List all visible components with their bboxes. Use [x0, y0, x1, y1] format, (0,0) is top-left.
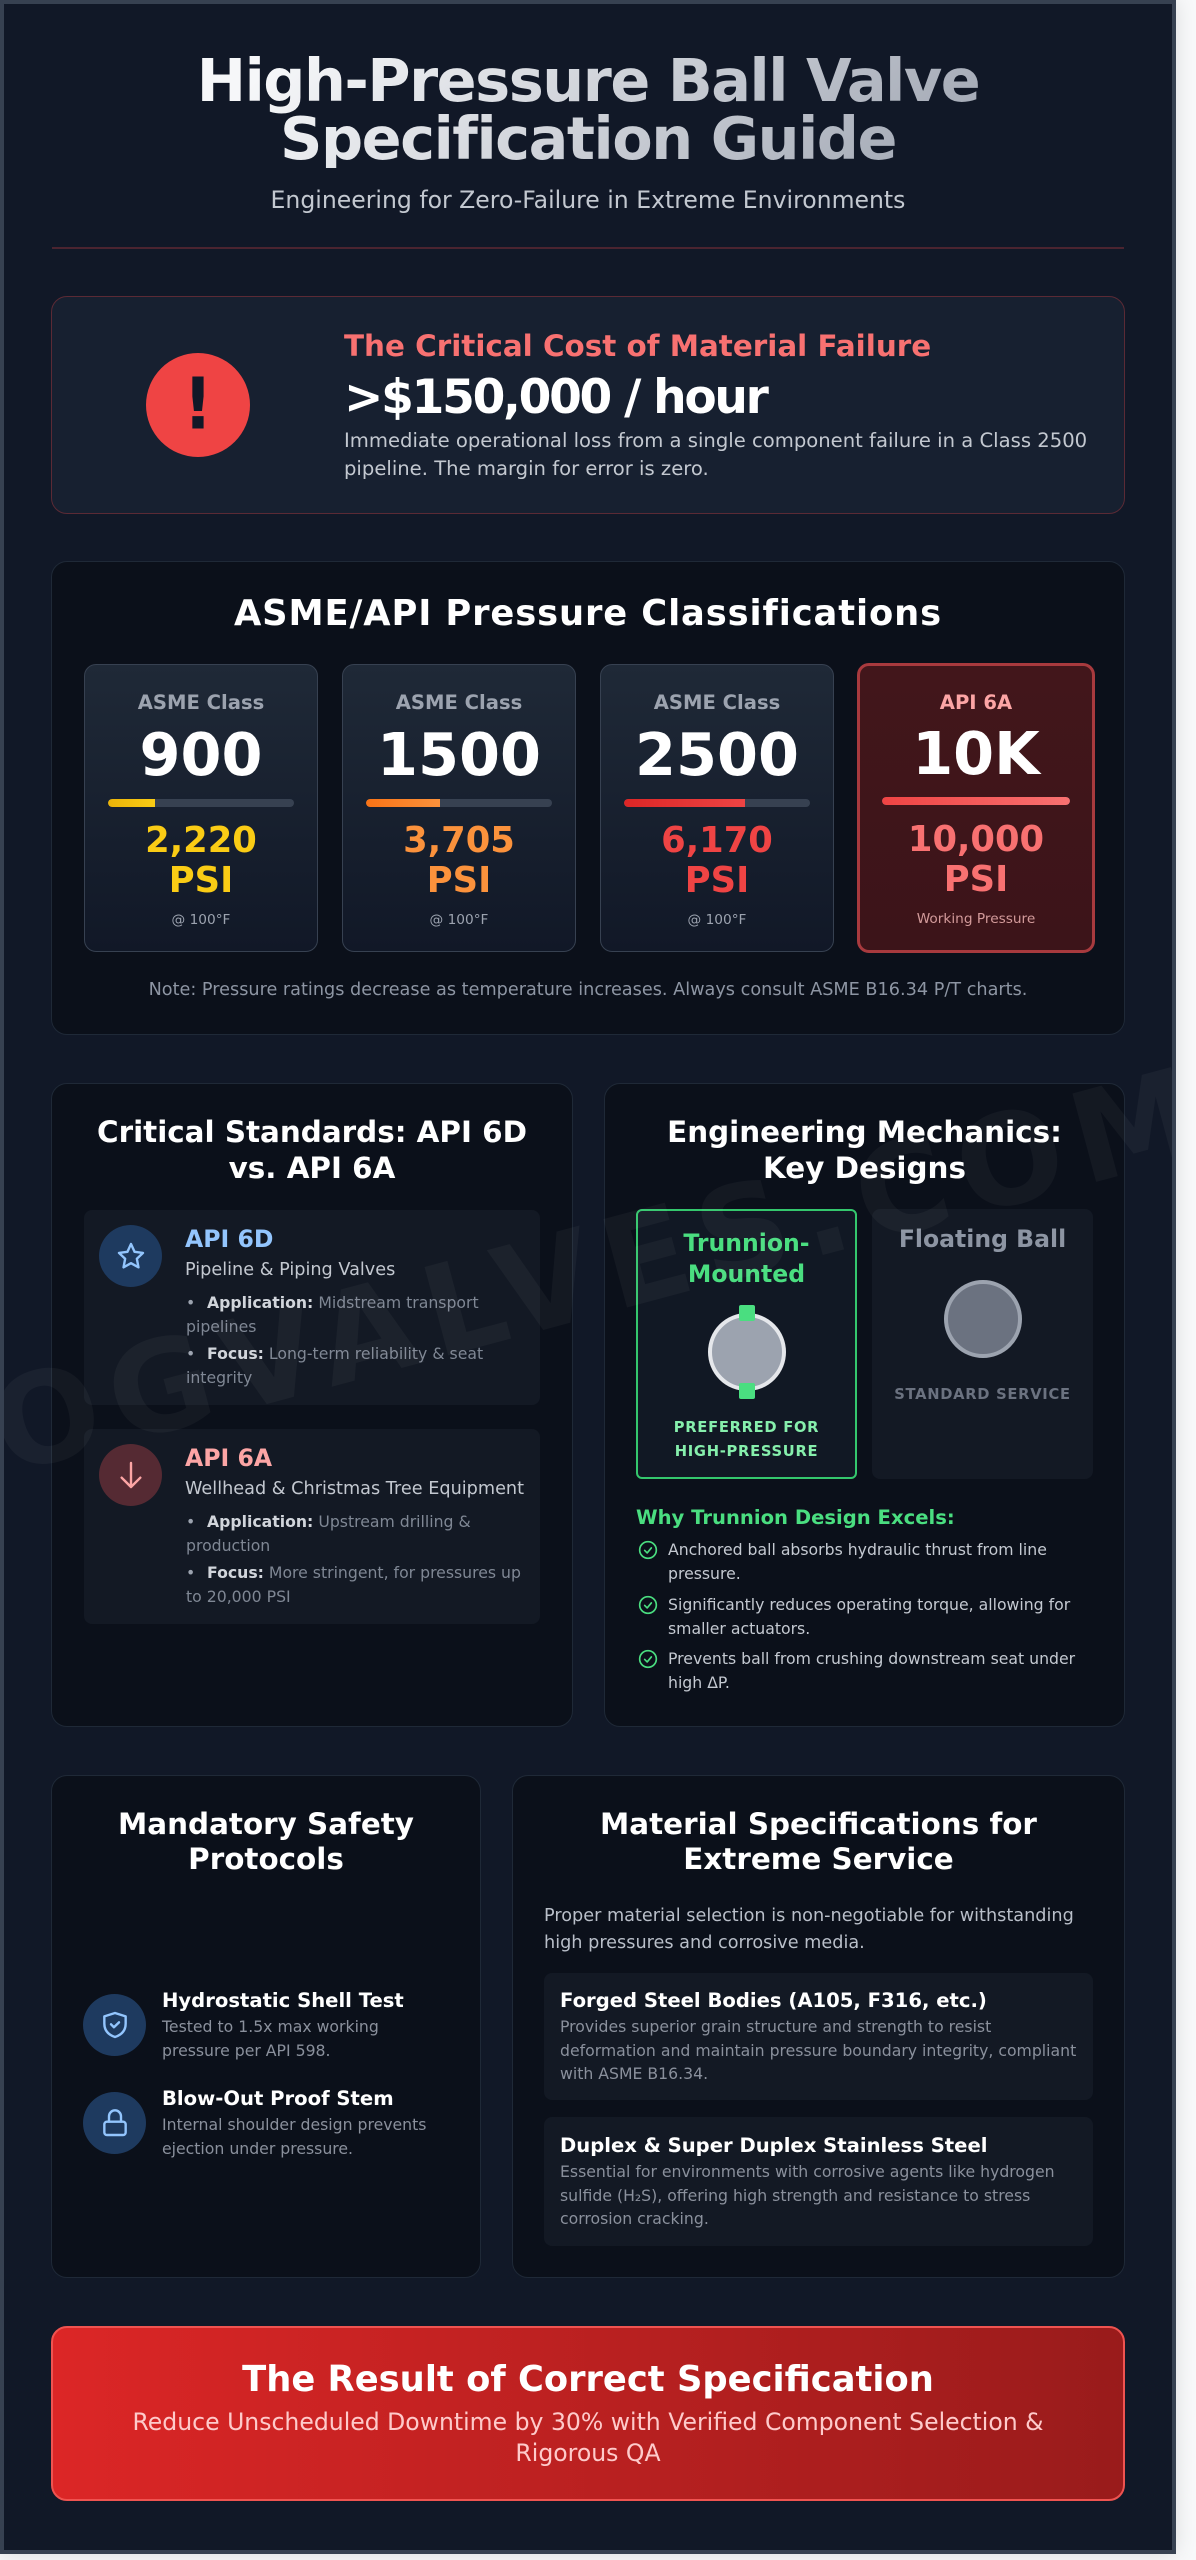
card: class 2500: @ 100°F	[688, 912, 746, 928]
panel: engineering mechanics	[604, 1083, 1125, 1727]
protocol: blow-out stem: ejection under pressure.	[162, 2138, 353, 2158]
trunnion note	[674, 1419, 819, 1460]
alert body	[344, 429, 1087, 480]
diagram: trunnion ball	[708, 1313, 786, 1391]
title: High-Pressure Ball Valve	[197, 46, 979, 115]
icon: star	[99, 1225, 162, 1287]
API 6D list: Application: Midstream transport	[207, 1293, 479, 1312]
API 6D list: pipelines	[186, 1317, 256, 1336]
API 6A focus: •	[186, 1563, 195, 1582]
callout: result	[51, 2326, 1125, 2501]
trunnion title: Trunnion-	[683, 1229, 810, 1257]
icon: lock	[83, 2092, 146, 2154]
benefit 2: smaller actuators.	[668, 1618, 810, 1638]
material: forged steel: with ASME B16.34.	[560, 2064, 708, 2083]
card: class 2500: ASME Class	[654, 691, 780, 714]
benefit 1	[638, 1540, 1047, 1583]
alert heading: The Critical Cost of Material Failure	[344, 329, 931, 363]
API 6A list: Application: Upstream drilling &	[207, 1512, 471, 1531]
card: class 2500	[600, 664, 834, 952]
trunnion title: Mounted	[688, 1260, 805, 1288]
card: class 2500: 2500	[635, 720, 799, 789]
icon: arrow down	[99, 1444, 162, 1506]
callout text	[132, 2408, 1044, 2467]
sub-panel: API 6A	[84, 1429, 540, 1624]
card: class 1500: 3,705	[403, 820, 515, 861]
benefit 2: Significantly reduces operating torque, allowing for	[668, 1594, 1070, 1614]
intro text	[544, 1906, 1074, 1953]
panel: pressure classifications	[51, 561, 1125, 1035]
material: duplex	[544, 2117, 1093, 2246]
heading: standards: Critical Standards: API 6D	[97, 1115, 527, 1149]
card: class 900	[84, 664, 318, 952]
panel: material specifications	[512, 1775, 1125, 2278]
API 6D list: •	[186, 1293, 195, 1312]
panel: critical cost alert	[51, 296, 1125, 514]
callout title: The Result of Correct Specification	[242, 2359, 934, 2400]
card: API 6A 10K: Working Pressure	[917, 911, 1035, 927]
heading: materials	[600, 1807, 1037, 1876]
sub-panel: API 6D	[84, 1210, 540, 1405]
benefit 1: Anchored ball absorbs hydraulic thrust from line	[668, 1540, 1047, 1559]
title	[168, 52, 1008, 168]
API 6A focus	[186, 1563, 521, 1606]
title: Specification Guide	[280, 104, 896, 173]
API 6A focus: Focus: More stringent, for pressures up	[207, 1563, 521, 1582]
heading: mechanics	[667, 1115, 1062, 1185]
material: forged steel	[544, 1973, 1093, 2100]
card: class 2500: PSI	[685, 860, 749, 901]
callout text: Reduce Unscheduled Downtime by 30% with Verified Component Selection &	[132, 2408, 1044, 2436]
heading: materials: Material Specifications for	[600, 1807, 1037, 1841]
API 6D title: API 6D	[185, 1225, 273, 1253]
API 6D list	[186, 1293, 479, 1336]
API 6A subtitle: Wellhead & Christmas Tree Equipment	[185, 1479, 524, 1499]
heading: standards	[97, 1115, 527, 1185]
list: trunnion benefits	[638, 1540, 1076, 1692]
card: API 6A 10K	[857, 663, 1095, 953]
material: forged steel: Forged Steel Bodies (A105, F316, etc.)	[560, 1989, 987, 2012]
heading: standards: vs. API 6A	[229, 1151, 395, 1185]
icon: alert: !	[183, 364, 213, 446]
card: API 6A 10K: API 6A	[940, 691, 1012, 714]
material: duplex: corrosion cracking.	[560, 2209, 709, 2228]
material: forged steel: deformation and maintain pressure boundary integrity, compliant	[560, 2040, 1076, 2060]
material: duplex: Duplex & Super Duplex Stainless Steel	[560, 2134, 987, 2157]
protocol: hydrostatic test: pressure per API 598.	[162, 2040, 331, 2060]
heading: mechanics: Engineering Mechanics:	[667, 1115, 1062, 1149]
heading: materials: Extreme Service	[683, 1842, 954, 1876]
why trunnion heading: Why Trunnion Design Excels:	[636, 1506, 955, 1529]
benefit 3	[638, 1649, 1076, 1692]
card: class 2500: 6,170	[661, 820, 773, 861]
intro text: Proper material selection is non-negotiable for withstanding	[544, 1906, 1074, 1926]
benefit 3: Prevents ball from crushing downstream seat under	[668, 1649, 1075, 1668]
diagram: floating ball	[944, 1280, 1022, 1358]
trunnion note: PREFERRED FOR	[674, 1419, 819, 1436]
API 6A list: production	[186, 1536, 270, 1555]
API 6D focus: Focus: Long-term reliability & seat	[207, 1344, 483, 1363]
protocol: blow-out stem: Internal shoulder design prevents	[162, 2115, 426, 2134]
card: class 900: @ 100°F	[172, 912, 230, 928]
card: class 1500: PSI	[427, 860, 491, 901]
card: class 1500: ASME Class	[396, 691, 522, 714]
API 6A focus: to 20,000 PSI	[186, 1587, 291, 1606]
API 6A title: API 6A	[185, 1444, 272, 1472]
icon: shield	[83, 1994, 146, 2056]
API 6D focus: •	[186, 1344, 195, 1363]
heading: safety: Protocols	[188, 1842, 344, 1876]
card: API 6A 10K: 10K	[912, 719, 1040, 788]
protocol: hydrostatic test	[162, 1989, 404, 2060]
trunnion note: HIGH-PRESSURE	[675, 1442, 818, 1460]
material: forged steel: Provides superior grain structure and strength to resist	[560, 2017, 991, 2036]
API 6A list: •	[186, 1512, 195, 1531]
card: class 1500: 1500	[377, 720, 541, 789]
card: class 1500: @ 100°F	[430, 912, 488, 928]
alert figure: >$150,000 / hour	[344, 370, 767, 425]
protocol: blow-out stem	[162, 2087, 426, 2158]
floating note: STANDARD SERVICE	[894, 1386, 1071, 1403]
panel: critical standards	[51, 1083, 573, 1727]
benefit 1: pressure.	[668, 1564, 741, 1583]
note: Note: Pressure ratings decrease as temperature increases. Always consult ASME B16.34 P/T charts.	[149, 980, 1027, 1000]
material: duplex: Essential for environments with corrosive agents like hydrogen	[560, 2162, 1055, 2181]
panel: safety protocols	[51, 1775, 481, 2278]
material: duplex: sulfide (H₂S), offering high strength and resistance to stress	[560, 2186, 1030, 2204]
heading: safety	[118, 1807, 414, 1876]
icon: alert	[146, 353, 250, 457]
intro text: high pressures and corrosive media.	[544, 1933, 865, 1953]
API 6A list	[186, 1512, 471, 1555]
floating title: Floating Ball	[899, 1225, 1066, 1253]
protocol: hydrostatic test: Hydrostatic Shell Test	[162, 1989, 404, 2012]
card: class 900: 2,220	[145, 820, 257, 861]
card: class 900: ASME Class	[138, 691, 264, 714]
trunnion title	[683, 1229, 810, 1288]
protocol: hydrostatic test: Tested to 1.5x max working	[162, 2017, 379, 2036]
card: class 900: 900	[140, 720, 262, 789]
benefit 3: high ΔP.	[668, 1673, 730, 1692]
API 6D focus	[186, 1344, 483, 1387]
subtitle: Engineering for Zero-Failure in Extreme Environments	[271, 186, 905, 214]
card: class 1500	[342, 664, 576, 952]
card: trunnion-mounted	[636, 1209, 857, 1479]
callout text: Rigorous QA	[515, 2439, 661, 2467]
API 6D focus: integrity	[186, 1368, 252, 1387]
heading: pressure classifications: ASME/API Pressure Classifications	[234, 593, 942, 634]
API 6D subtitle: Pipeline & Piping Valves	[185, 1260, 395, 1280]
alert body: Immediate operational loss from a single component failure in a Class 2500	[344, 429, 1087, 452]
heading: safety: Mandatory Safety	[118, 1807, 414, 1841]
heading: mechanics: Key Designs	[763, 1151, 966, 1185]
protocol: blow-out stem: Blow-Out Proof Stem	[162, 2087, 394, 2110]
card: API 6A 10K: 10,000	[908, 819, 1044, 860]
card: API 6A 10K: PSI	[944, 859, 1008, 900]
card: floating ball	[872, 1209, 1093, 1479]
card: class 900: PSI	[169, 860, 233, 901]
alert body: pipeline. The margin for error is zero.	[344, 457, 709, 480]
benefit 2	[638, 1594, 1070, 1638]
